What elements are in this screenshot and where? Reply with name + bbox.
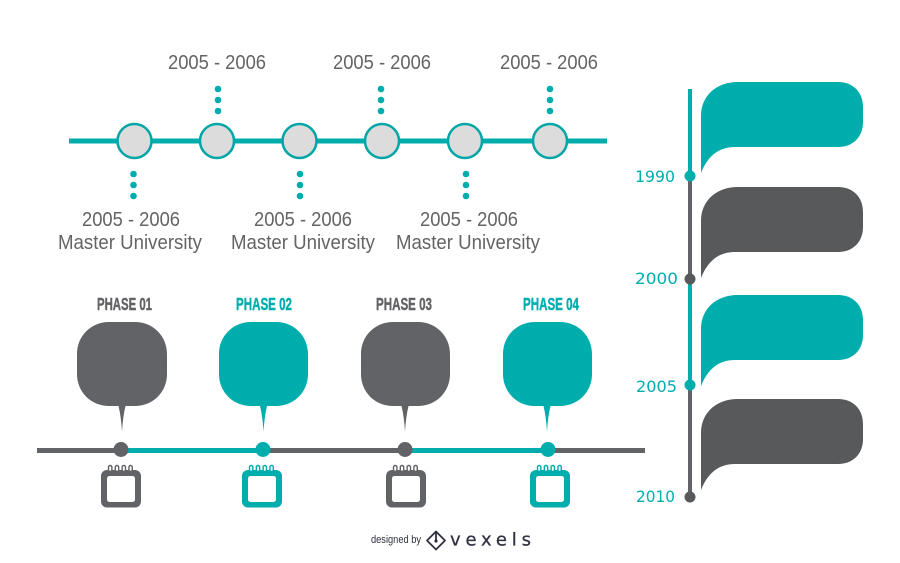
icon: calendar phase 02 — [242, 466, 282, 508]
phase 03 speech bubble — [361, 322, 450, 432]
timeline nodes — [118, 124, 567, 158]
flag bubble 2010 — [701, 399, 863, 490]
flag bubble 2000 — [701, 187, 863, 278]
phase headings: PHASE 02 — [236, 294, 292, 314]
designed by text: designed by — [371, 534, 421, 546]
date and university labels below the line: Master University — [58, 232, 202, 254]
phase axis — [37, 448, 645, 453]
year labels — [635, 167, 678, 506]
brand credit — [371, 530, 531, 550]
panel: horizontal education timeline — [58, 52, 607, 254]
icon: calendar phase 04 — [530, 466, 570, 508]
phase headings — [97, 294, 579, 314]
icon: vexels diamond logo — [427, 532, 445, 550]
phase 04 speech bubble — [503, 322, 592, 432]
year labels: 1990 — [635, 167, 675, 186]
date and university labels below the line: 2005 - 2006 — [82, 209, 180, 231]
panel: phase timeline — [37, 294, 645, 508]
phase headings: PHASE 03 — [376, 294, 432, 314]
year labels: 2010 — [636, 487, 675, 506]
date labels above the line: 2005 - 2006 — [333, 52, 431, 74]
year labels: 2000 — [635, 269, 678, 288]
phase 01 speech bubble — [77, 322, 167, 432]
icon: calendar phase 01 — [101, 466, 141, 508]
icon: calendar phase 03 — [386, 466, 426, 508]
timeline axis — [69, 138, 607, 144]
date and university labels below the line — [58, 209, 540, 254]
dotted connectors — [130, 86, 553, 199]
date and university labels below the line: 2005 - 2006 — [420, 209, 518, 231]
panel: vertical year timeline — [635, 82, 863, 506]
phase headings: PHASE 01 — [97, 294, 152, 314]
date labels above the line — [168, 52, 598, 74]
phase markers — [114, 442, 556, 457]
date and university labels below the line: Master University — [396, 232, 540, 254]
flag bubble 2005 — [701, 295, 863, 386]
phase headings: PHASE 04 — [523, 294, 579, 314]
year markers — [684, 170, 696, 502]
date labels above the line: 2005 - 2006 — [168, 52, 266, 74]
flag bubble 1990 — [701, 82, 863, 173]
date and university labels below the line: 2005 - 2006 — [254, 209, 352, 231]
vertical axis — [688, 89, 692, 497]
phase 02 speech bubble — [219, 322, 308, 432]
date and university labels below the line: Master University — [231, 232, 375, 254]
date labels above the line: 2005 - 2006 — [500, 52, 598, 74]
vexels wordmark: vexels — [450, 530, 531, 550]
year labels: 2005 — [636, 377, 677, 396]
